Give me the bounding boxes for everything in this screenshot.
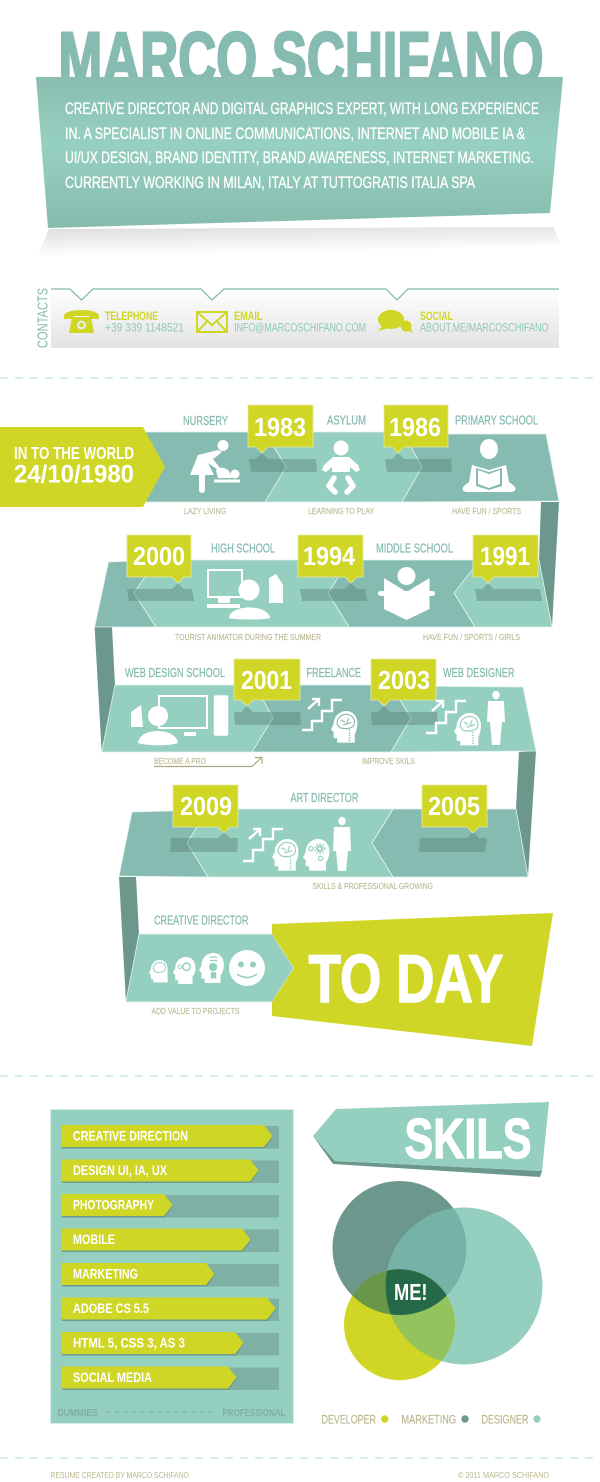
- skills banner: [313, 1102, 549, 1177]
- year flag: 2003: 2003: [378, 665, 430, 695]
- year flag: 1994: 1994: [303, 541, 355, 571]
- row 4 segments: [119, 809, 528, 877]
- email text: EMAIL: [234, 311, 262, 323]
- skill: photography: [62, 1194, 279, 1218]
- skills growing note: SKILLS & PROFESSIONAL GROWING: [312, 881, 433, 891]
- middle school label: MIDDLE SCHOOL: [376, 540, 453, 556]
- row 5 segment: [126, 934, 294, 1002]
- row 3 segments: [102, 685, 536, 752]
- telephone text: [105, 311, 184, 334]
- have fun sports note: HAVE FUN / SPORTS: [452, 506, 521, 516]
- year flag: 2003: [371, 659, 436, 706]
- web designer label: WEB DESIGNER: [443, 665, 514, 680]
- learning to play note: LEARNING TO PLAY: [308, 506, 374, 516]
- email text: [234, 311, 366, 334]
- lazy living note: LAZY LIVING: [184, 506, 226, 516]
- icon: reader: [462, 439, 516, 492]
- skill: html css as: [62, 1332, 279, 1356]
- icon: freelance stairs and head: [302, 699, 357, 743]
- email text: INFO@MARCOSCHIFANO.COM: [234, 322, 366, 334]
- icon: email: [197, 312, 227, 332]
- freelance label: FREELANCE: [306, 665, 361, 680]
- start arrow: in to the world: [0, 427, 165, 507]
- skill: social media: [62, 1366, 279, 1390]
- legend: DESIGNER: [482, 1412, 529, 1426]
- tourist animator note: TOURIST ANIMATOR DURING THE SUMMER: [175, 632, 321, 642]
- year flag: 1991: [473, 535, 538, 583]
- art director label: ART DIRECTOR: [290, 790, 358, 805]
- row 1 segments: [146, 432, 559, 502]
- scale: dummies to professional: PROFESSIONAL: [222, 1407, 286, 1419]
- row 2 segments: [95, 560, 552, 627]
- year flag: 1986: 1986: [389, 412, 441, 442]
- add value note: ADD VALUE TO PROJECTS: [152, 1006, 240, 1016]
- year flag: 1983: 1983: [254, 412, 306, 442]
- skill: mobile: [62, 1228, 279, 1252]
- year flag: 2005: 2005: [428, 791, 480, 821]
- icon: telephone: [64, 310, 99, 333]
- icon: baby: [322, 440, 360, 492]
- panel background: [36, 77, 563, 228]
- social text: [420, 311, 549, 334]
- icon: middle school book: [378, 567, 435, 620]
- year flag: 2000: 2000: [133, 541, 185, 571]
- year flag: 1986: [384, 405, 448, 453]
- intro text: CURRENTLY WORKING IN MILAN, ITALY AT TUTTOGRATIS ITALIA SPA: [65, 174, 475, 192]
- venn diagram: [332, 1181, 542, 1380]
- social text: SOCIAL: [420, 311, 453, 323]
- icon: web designer stairs, head and man: [426, 691, 505, 745]
- skill: adobe cs: ADOBE CS 5.5: [73, 1300, 149, 1316]
- intro text: [65, 100, 539, 192]
- year flag: 2009: 2009: [180, 791, 232, 821]
- panel: contacts: [34, 288, 559, 348]
- primary school label: PRIMARY SCHOOL: [455, 412, 538, 428]
- skills background: [50, 1110, 294, 1424]
- skills banner: SKILS: [404, 1107, 532, 1171]
- scale: dummies to professional: [58, 1407, 286, 1419]
- skill: photography: PHOTOGRAPHY: [73, 1196, 154, 1212]
- social text: ABOUT.ME/MARCOSCHIFANO: [420, 322, 549, 334]
- nursery label: NURSERY: [183, 413, 228, 428]
- venn diagram: ME!: [394, 1279, 428, 1305]
- footer copyright: © 2011 MARCO SCHIFANO: [458, 1470, 549, 1480]
- year flag: 1983: [248, 405, 313, 453]
- skill: adobe cs: [62, 1298, 279, 1321]
- fold: row 3 to 4: [516, 751, 536, 877]
- become a pro note: BECOME A PRO: [154, 756, 206, 766]
- timeline labels: [125, 412, 538, 1016]
- legend: MARKETING: [402, 1412, 456, 1426]
- year flag: 2005: [422, 785, 487, 833]
- icon: social bubbles: [378, 310, 413, 333]
- skill: creative direction: CREATIVE DIRECTION: [73, 1128, 188, 1144]
- skill: marketing: [62, 1263, 279, 1286]
- improve skills note: IMPROVE SKILS: [362, 756, 415, 766]
- skill: design ui: [62, 1160, 279, 1183]
- panel: skills bars: [50, 1110, 294, 1424]
- have fun sports girls note: HAVE FUN / SPORTS / GIRLS: [423, 632, 520, 642]
- web design school label: WEB DESIGN SCHOOL: [125, 665, 225, 680]
- skill: html css as: HTML 5, CSS 3, AS 3: [73, 1334, 185, 1350]
- today arrow: [272, 913, 553, 1046]
- skill: design ui: DESIGN UI, IA, UX: [73, 1162, 168, 1178]
- icon: high school computer: [207, 570, 283, 620]
- icon: art director stairs, heads and man: [243, 817, 351, 871]
- legend: DEVELOPER: [322, 1412, 376, 1426]
- icon: creative director heads and smiley: [149, 950, 265, 986]
- start arrow: in to the world: IN TO THE WORLD: [14, 443, 134, 463]
- year flag: 1991: 1991: [480, 541, 530, 571]
- fold: row 2 to 3: [95, 627, 115, 752]
- year flag: 2001: [234, 659, 300, 706]
- skill: mobile: MOBILE: [73, 1231, 115, 1247]
- contacts background: [51, 289, 559, 348]
- year flag: 1994: [298, 535, 363, 583]
- start arrow: in to the world: 24/10/1980: [14, 460, 134, 488]
- creative director label: CREATIVE DIRECTOR: [154, 912, 248, 928]
- legend: [322, 1412, 541, 1426]
- telephone text: TELEPHONE: [105, 311, 158, 323]
- contacts label: CONTACTS: [34, 288, 52, 348]
- asylum label: ASYLUM: [327, 412, 366, 428]
- year flag: 2009: [173, 785, 238, 833]
- icon: web design computer: [131, 695, 228, 745]
- fold: row 1 to 2: [539, 502, 559, 627]
- skill: creative direction: [62, 1125, 279, 1148]
- arrow: become a pro: [154, 758, 262, 766]
- panel: intro: [36, 77, 563, 260]
- shadow bars under year flags: [127, 453, 542, 852]
- scale: dummies to professional: DUMMIES: [58, 1407, 98, 1419]
- skill: marketing: MARKETING: [73, 1266, 138, 1282]
- telephone text: +39 339 1148521: [105, 322, 184, 334]
- today arrow: TO DAY: [308, 941, 504, 1017]
- icon: nursery: [190, 440, 240, 493]
- timeline ribbon: [95, 432, 559, 1002]
- footer credit: RESUME CREATED BY MARCO SCHIFANO: [50, 1470, 189, 1480]
- year flag: 2000: [127, 535, 191, 583]
- panel shadow: [36, 227, 560, 260]
- skill: social media: SOCIAL MEDIA: [73, 1369, 152, 1385]
- high school label: HIGH SCHOOL: [211, 540, 275, 556]
- year flag: 2001: 2001: [241, 665, 292, 695]
- fold: row 4 to 5: [119, 877, 139, 1002]
